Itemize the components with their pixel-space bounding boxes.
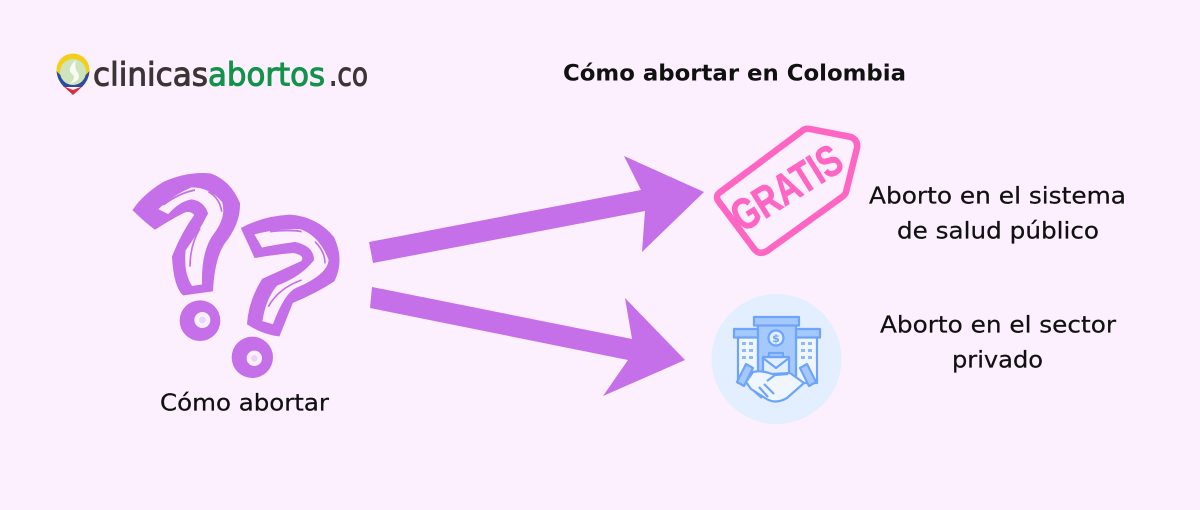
label: private sector — [880, 312, 1117, 374]
label: private sector: Aborto en el sector — [880, 312, 1117, 338]
icon: private sector buildings and handshake — [712, 294, 842, 424]
building windows — [742, 342, 812, 359]
tag text: GRATIS — [722, 135, 852, 241]
title: Cómo abortar en Colombia — [563, 62, 906, 86]
icon: GRATIS price tag — [717, 129, 857, 253]
logo: clinicasabortos.co — [56, 54, 368, 95]
right question mark — [232, 215, 339, 378]
logo wordmark: .co — [329, 56, 368, 94]
icon: map pin — [56, 54, 90, 95]
label: Cómo abortar: Cómo abortar — [160, 390, 330, 416]
left question mark — [133, 174, 239, 341]
arrow: to public health system — [369, 156, 704, 263]
icon: private sector buildings and handshake: $ — [772, 332, 780, 345]
label: private sector: privado — [952, 348, 1043, 374]
label: public health system: Aborto en el sistema — [869, 184, 1126, 210]
label: public health system: de salud público — [897, 218, 1099, 244]
icon: question marks — [133, 174, 339, 378]
logo wordmark: abortos — [208, 56, 325, 94]
logo wordmark: clinicas — [93, 56, 208, 94]
label: public health system — [869, 184, 1126, 244]
arrow: to private sector — [370, 287, 685, 396]
